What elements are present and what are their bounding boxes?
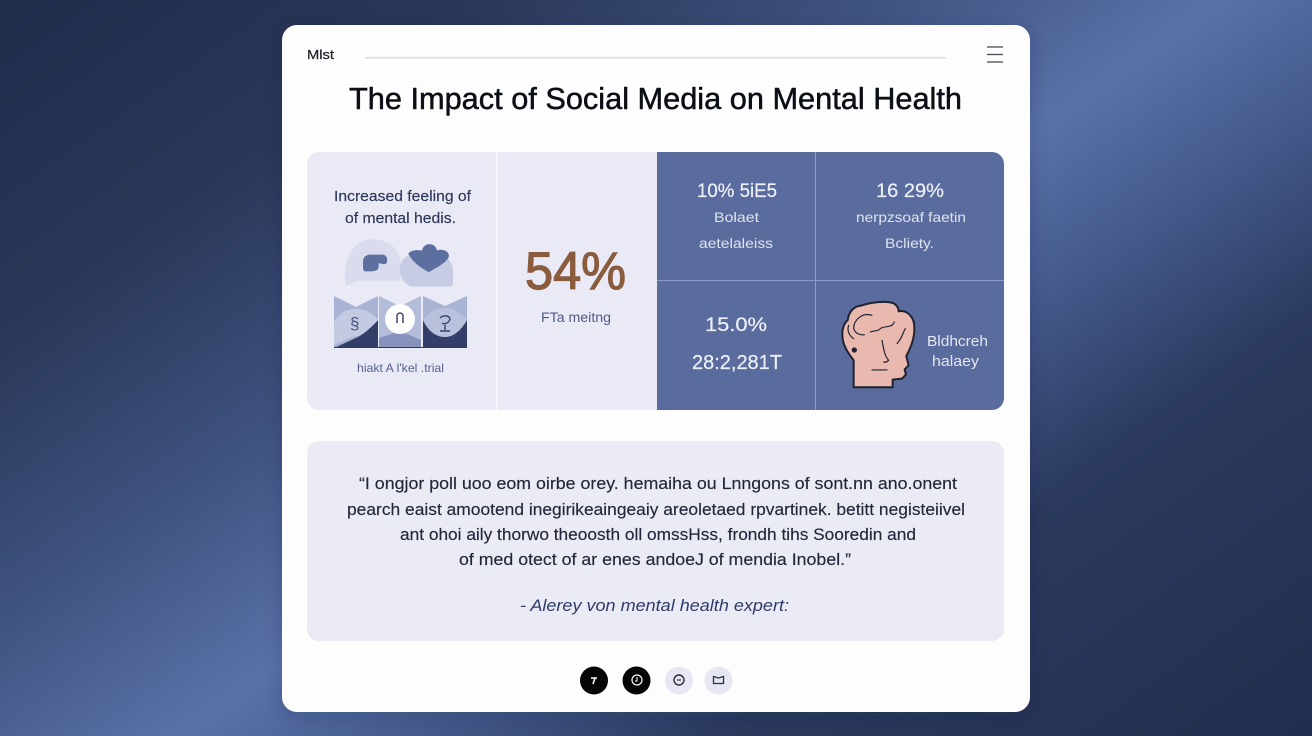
panel: quote: [307, 441, 1004, 641]
icon: menu: [987, 47, 1003, 62]
quote text: of med otect of ar enes andoeJ of mendia Inobel.”: [459, 551, 851, 569]
icon: speech bubbles: [345, 239, 453, 287]
icon: centre circle: [385, 304, 415, 334]
icon: folded banner: [334, 296, 467, 348]
card: [282, 25, 1030, 712]
quote attribution: - Alerey von mental health expert:: [520, 596, 789, 615]
text: head caption: [927, 334, 988, 370]
icon: right glyph: [440, 316, 450, 331]
title: The Impact of Social Media on Mental Health: [349, 82, 962, 116]
quote text: “I ongjor poll uoo eom oirbe orey. hemaiha ou Lnngons of sont.nn ano.onent: [359, 475, 957, 493]
stat cell: top right: 16 29%: [876, 181, 944, 202]
quote text: pearch eaist amootend inegirikeaingeaiy areoletaed rpvartinek. betitt negisteiivel: [347, 501, 965, 519]
text: feeling heading: Increased feeling of: [334, 188, 472, 205]
brand label: Mlst: [307, 47, 334, 62]
stat cell: top right: [856, 181, 966, 251]
icon: head profile: [842, 302, 914, 387]
stat cell: top left: [697, 181, 777, 251]
text: head caption: Bldhcreh: [927, 334, 988, 350]
stat cell: bottom left: [692, 315, 782, 374]
stat cell: bottom left: 28:2,281T: [692, 352, 782, 374]
panel: left stats background: [307, 152, 657, 410]
text: feeling heading: [334, 188, 472, 227]
panel: statistics: [307, 152, 1004, 410]
icon row: pagination buttons: [580, 666, 732, 694]
header rule: [365, 57, 946, 58]
icon: button one: [580, 666, 608, 694]
icon: left glyph: §: [350, 314, 359, 333]
stat: 54 percent: 54%: [525, 242, 626, 301]
text: banner caption: hiakt A l'kel .trial: [357, 361, 444, 375]
stat cell: top right: Bcliety.: [885, 235, 934, 251]
icon: button three: [665, 666, 693, 694]
text: stat caption: FTa meitng: [541, 310, 611, 325]
icon: button two: [622, 666, 650, 694]
panel: blue stat grid: [657, 152, 1004, 410]
text: feeling heading: of mental hedis.: [345, 210, 456, 227]
stat cell: top left: Bolaet: [714, 209, 759, 225]
icon: button four: [704, 666, 732, 694]
stat cell: top left: aetelaleiss: [699, 235, 773, 251]
stat cell: top left: 10% 5iE5: [697, 181, 777, 202]
text: head caption: halaey: [932, 354, 980, 370]
quote text: ant ohoi aily thorwo theoosth oll omssHss, frondh tihs Sooredin and: [400, 526, 916, 544]
stat cell: top right: nerpzsoaf faetin: [856, 209, 966, 225]
stat cell: bottom left: 15.0%: [705, 315, 767, 336]
quote text: [347, 475, 965, 569]
